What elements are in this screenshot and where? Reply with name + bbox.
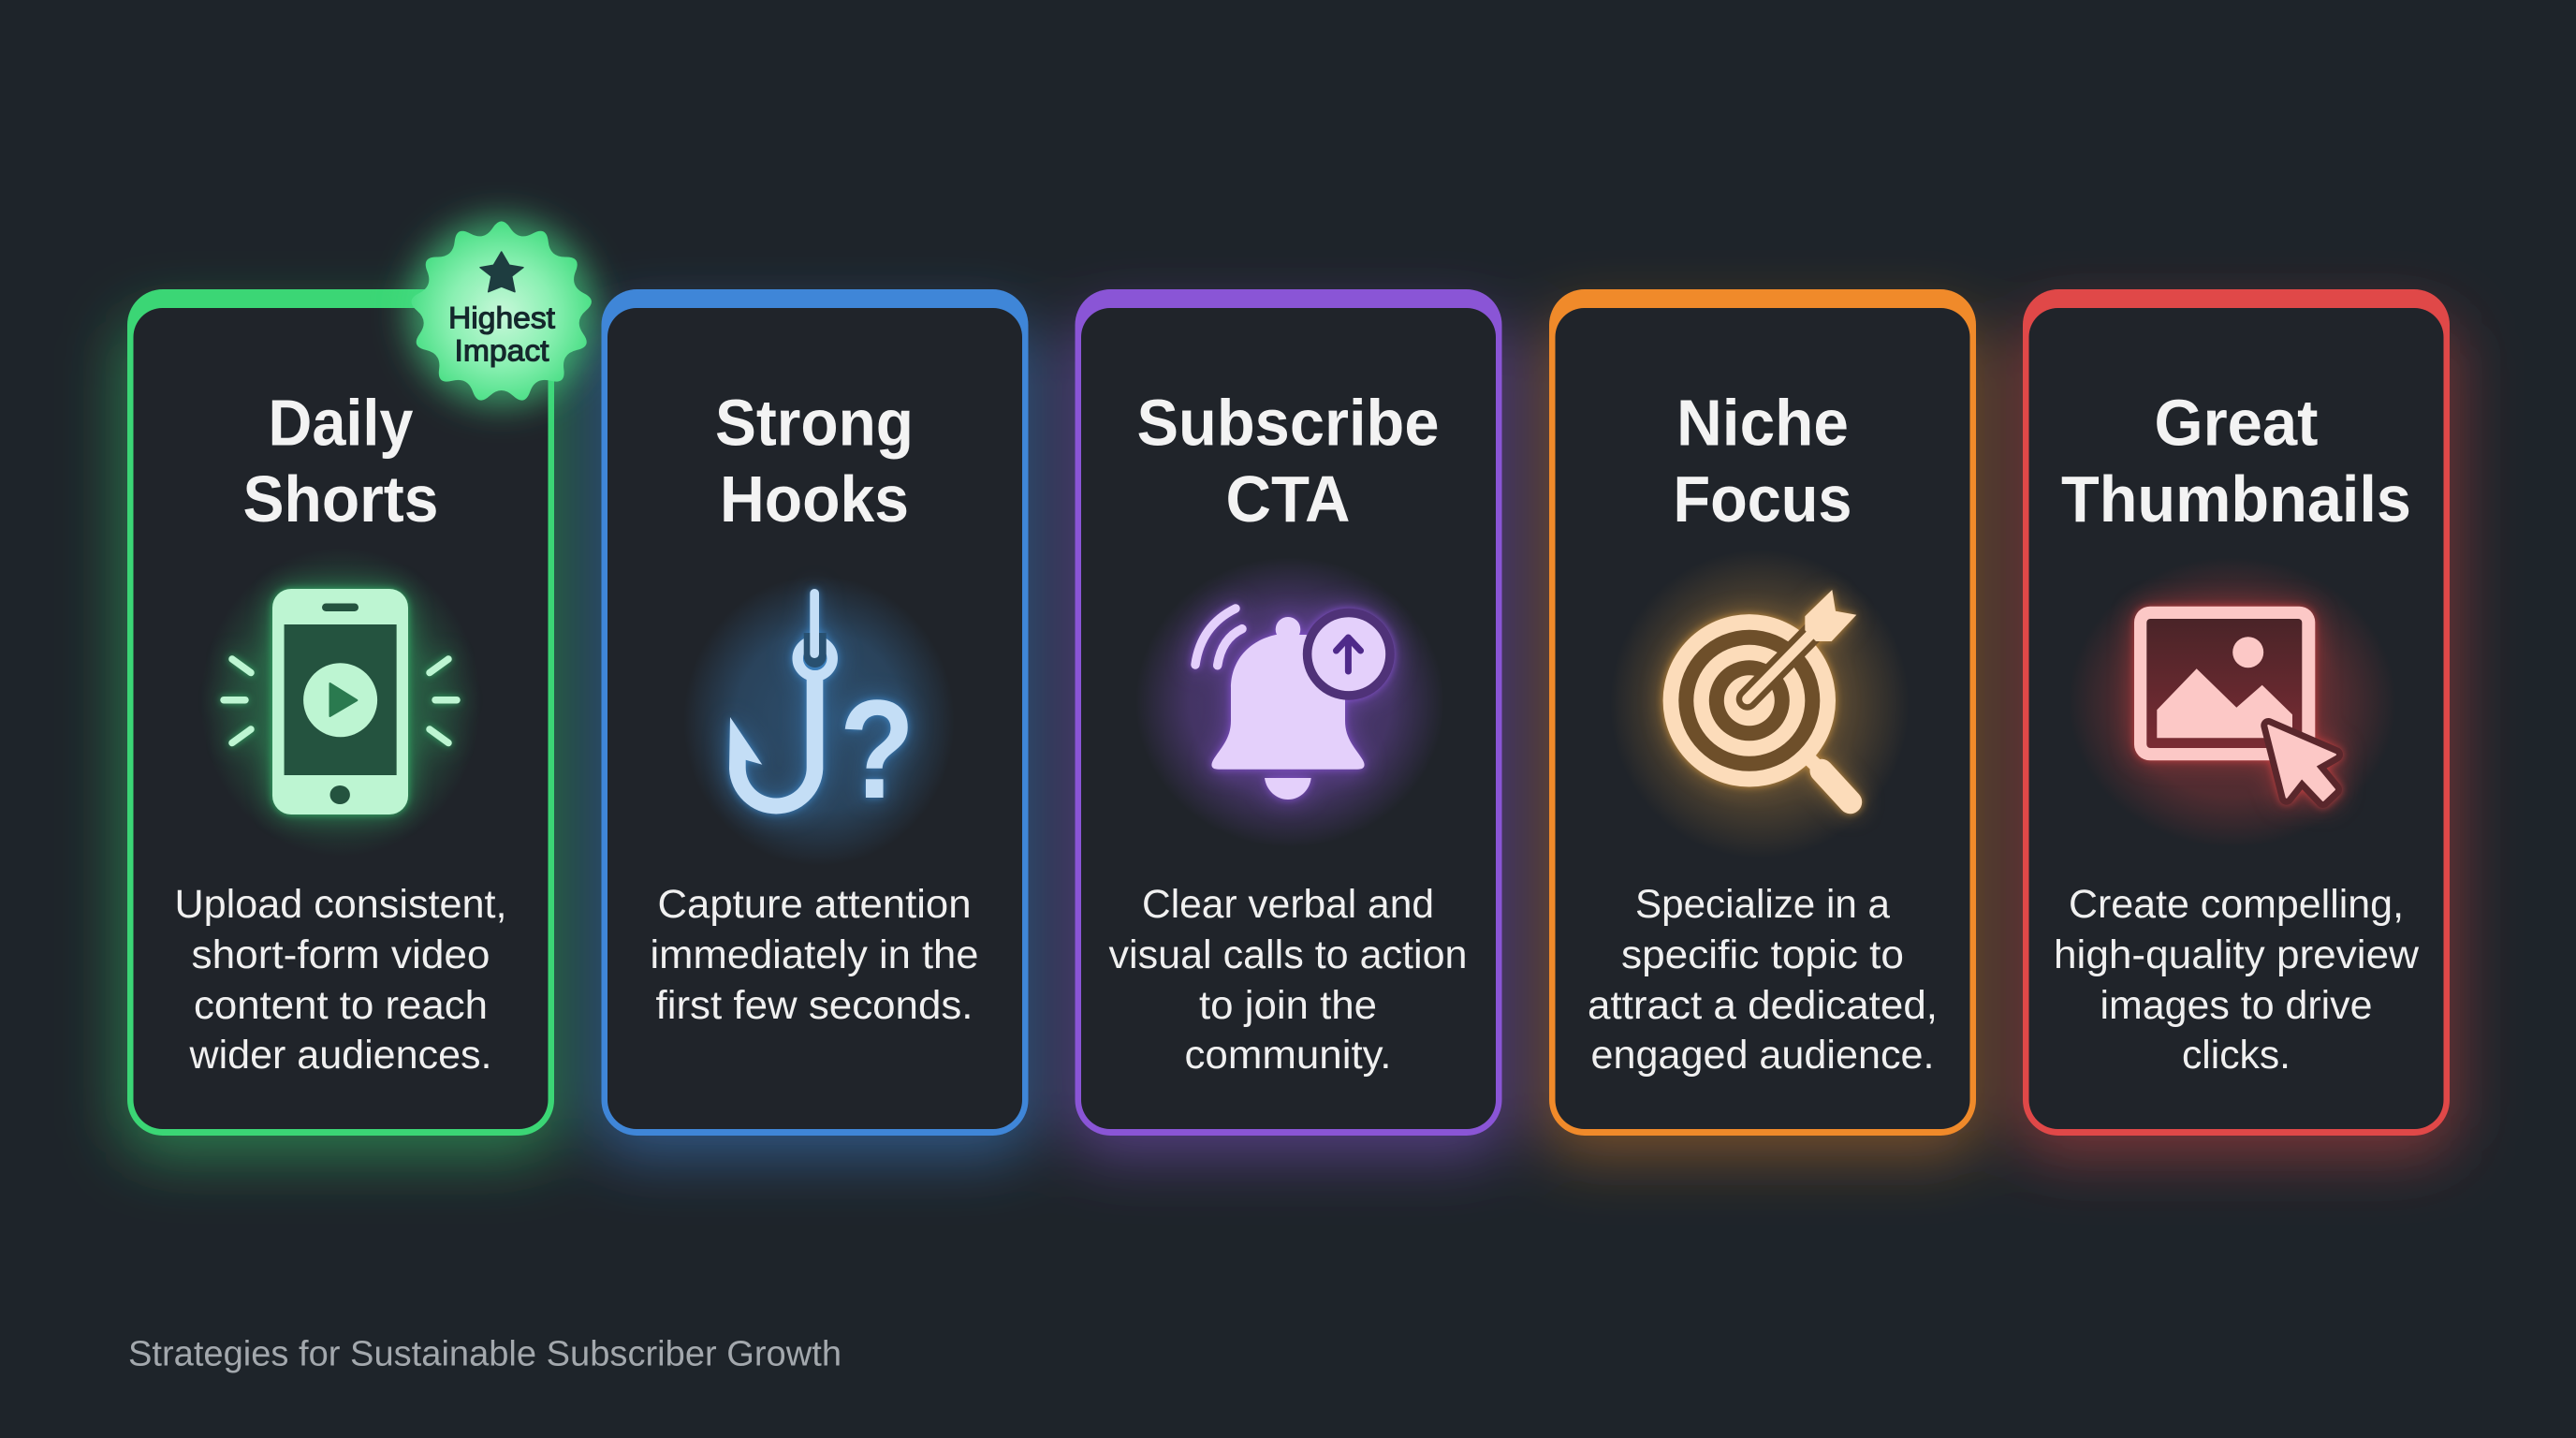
- description: Subscribe CTA: [1108, 882, 1468, 1078]
- icon: star: [480, 252, 523, 292]
- description: Strong Hooks: first few seconds.: [655, 983, 973, 1028]
- badge label: Highest: [448, 301, 555, 335]
- description: Great Thumbnails: images to drive: [2100, 983, 2372, 1028]
- heading: Niche Focus: Focus: [1674, 462, 1852, 536]
- heading: Strong Hooks: [715, 386, 914, 536]
- heading: Great Thumbnails: Great: [2155, 386, 2318, 459]
- badge: Highest Impact: [408, 218, 595, 405]
- icon glow: bell: [1135, 557, 1444, 847]
- description: Subscribe CTA: visual calls to action: [1108, 932, 1468, 977]
- heading: Niche Focus: Niche: [1676, 386, 1849, 459]
- badge label: Impact: [455, 334, 549, 368]
- description: Great Thumbnails: Create compelling,: [2069, 882, 2404, 927]
- description: Strong Hooks: immediately in the: [650, 932, 979, 977]
- card frame: green: [127, 289, 554, 1136]
- icon: fish hook with question mark: ?: [840, 670, 915, 828]
- description: Subscribe CTA: Clear verbal and: [1142, 882, 1434, 927]
- badge burst shape: [411, 221, 592, 401]
- icon glow: target: [1610, 550, 1910, 858]
- icon: fish hook with question mark: [729, 589, 915, 828]
- heading: Daily Shorts: Daily: [268, 386, 414, 459]
- badge label: [448, 301, 555, 368]
- description: Strong Hooks: Capture attention: [657, 882, 972, 927]
- description: Strong Hooks: [650, 882, 979, 1028]
- description: Great Thumbnails: [2054, 882, 2420, 1078]
- panel: Niche Focus: [1549, 289, 1976, 1136]
- card frame: red: [2023, 289, 2450, 1136]
- heading: Subscribe CTA: CTA: [1226, 462, 1350, 536]
- description: Daily Shorts: [174, 882, 507, 1078]
- icon glow: hook: [683, 576, 955, 866]
- description: Daily Shorts: Upload consistent,: [174, 882, 507, 927]
- icon glow: thumbnail: [2069, 557, 2396, 847]
- heading: Niche Focus: [1674, 386, 1852, 536]
- footer caption: Strategies for Sustainable Subscriber Growth: [128, 1335, 842, 1374]
- heading: Daily Shorts: Shorts: [243, 462, 438, 536]
- heading: Daily Shorts: [243, 386, 438, 536]
- heading: Great Thumbnails: Thumbnails: [2061, 462, 2411, 536]
- heading: Great Thumbnails: [2061, 386, 2411, 536]
- description: Subscribe CTA: community.: [1185, 1033, 1391, 1078]
- heading: Subscribe CTA: Subscribe: [1136, 386, 1440, 459]
- panel: Great Thumbnails: [2023, 289, 2450, 1136]
- card glows: [122, 318, 2455, 1156]
- panel: Daily Shorts: [127, 218, 595, 1136]
- description: Daily Shorts: wider audiences.: [188, 1033, 492, 1078]
- card frame: orange: [1549, 289, 1976, 1136]
- description: Daily Shorts: short-form video: [191, 932, 490, 977]
- heading: Subscribe CTA: [1136, 386, 1440, 536]
- icon: phone with play button: [224, 589, 457, 814]
- badge glow: [408, 218, 595, 405]
- icon glow: phone: [200, 548, 481, 857]
- description: Niche Focus: engaged audience.: [1591, 1033, 1934, 1078]
- description: Great Thumbnails: clicks.: [2182, 1033, 2291, 1078]
- description: Niche Focus: attract a dedicated,: [1588, 983, 1938, 1028]
- heading: Strong Hooks: Strong: [715, 386, 914, 459]
- panel: Subscribe CTA: [1075, 289, 1501, 1136]
- card frame: blue: [601, 289, 1028, 1136]
- description: Niche Focus: specific topic to: [1621, 932, 1904, 977]
- description: Subscribe CTA: to join the: [1199, 983, 1377, 1028]
- description: Niche Focus: [1588, 882, 1938, 1078]
- card frame: purple: [1075, 289, 1501, 1136]
- icon: notification bell with subscribe arrow: [1195, 609, 1395, 800]
- panel: Strong Hooks: [601, 289, 1028, 1136]
- icon: target with arrow and handle: [1663, 590, 1856, 802]
- description: Niche Focus: Specialize in a: [1635, 882, 1890, 927]
- heading: Strong Hooks: Hooks: [720, 462, 909, 536]
- description: Daily Shorts: content to reach: [194, 983, 488, 1028]
- icon: image thumbnail with cursor: [2134, 607, 2335, 800]
- description: Great Thumbnails: high-quality preview: [2054, 932, 2420, 977]
